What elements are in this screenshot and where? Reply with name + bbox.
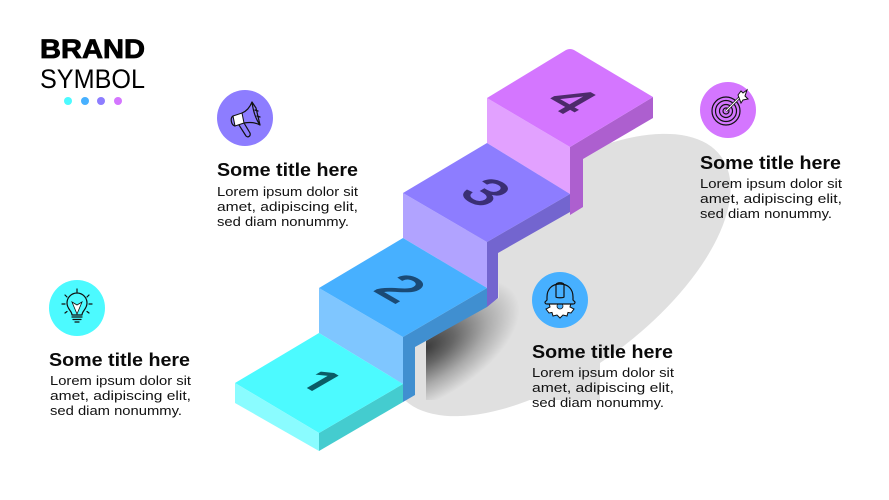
- step 1: 1: [280, 361, 356, 406]
- step 3: [403, 143, 570, 307]
- step 2: 2: [362, 266, 438, 311]
- icon: lightbulb: [49, 280, 105, 336]
- body text: amet, adipiscing elit,: [50, 388, 191, 403]
- title: Some title here: [532, 341, 673, 362]
- inner stair shadow: [426, 230, 600, 400]
- body text: Lorem ipsum dolor sit: [532, 365, 674, 380]
- body text: sed diam nonummy.: [217, 214, 349, 229]
- body text: sed diam nonummy.: [700, 206, 832, 221]
- body text: [700, 176, 842, 221]
- step 4: 4: [533, 78, 609, 123]
- staircase: [235, 49, 653, 451]
- body text: Lorem ipsum dolor sit: [217, 184, 358, 199]
- panel: item 4 target: [700, 82, 842, 221]
- panel: item 3 helmet: [532, 272, 674, 410]
- body text: sed diam nonummy.: [50, 403, 182, 418]
- body text: Lorem ipsum dolor sit: [700, 176, 842, 191]
- body text: amet, adipiscing elit,: [532, 380, 674, 395]
- body text: [50, 373, 191, 418]
- step 2: [319, 238, 487, 402]
- body text: [532, 365, 674, 410]
- icon: megaphone: [217, 90, 273, 146]
- title: Some title here: [217, 159, 358, 180]
- body text: Lorem ipsum dolor sit: [50, 373, 191, 388]
- title: Some title here: [49, 349, 190, 370]
- panel: item 2 megaphone: [217, 90, 358, 229]
- background shadow ellipse: [343, 80, 777, 470]
- step 3: 3: [447, 170, 523, 215]
- icon: target and arrow: [700, 82, 756, 138]
- step 1: [235, 333, 403, 451]
- body text: [217, 184, 358, 229]
- logo dots: [64, 97, 122, 105]
- title: Some title here: [700, 152, 841, 173]
- brand logo: [40, 34, 145, 105]
- step 4: [487, 49, 653, 215]
- body text: sed diam nonummy.: [532, 395, 664, 410]
- brand name: BRAND: [40, 34, 145, 64]
- body text: amet, adipiscing elit,: [217, 199, 358, 214]
- brand symbol word: SYMBOL: [40, 64, 145, 94]
- body text: amet, adipiscing elit,: [700, 191, 842, 206]
- panel: item 1 lightbulb: [49, 280, 191, 418]
- icon: helmet and gear: [532, 272, 588, 328]
